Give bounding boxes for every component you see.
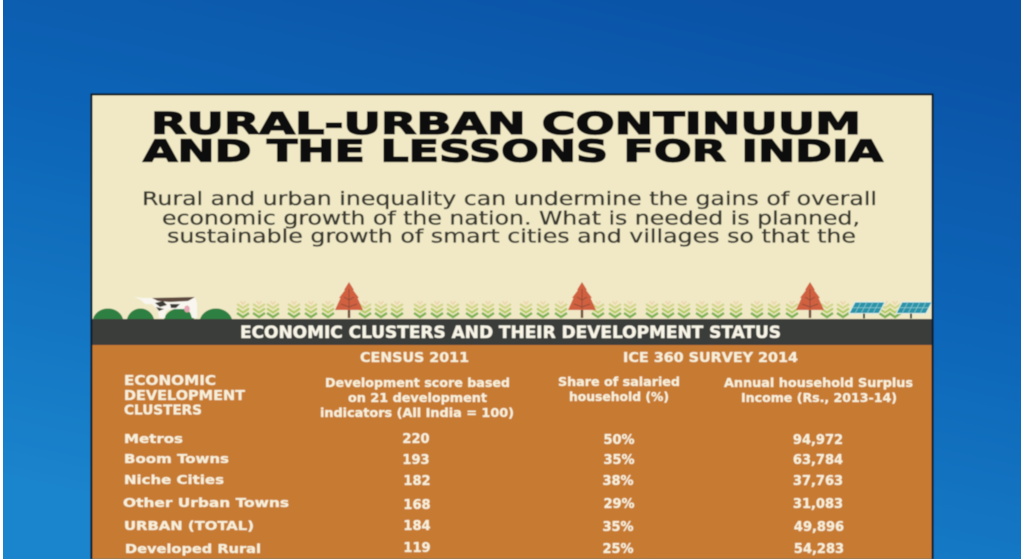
row: Metros: 220 [402,432,430,447]
row: Boom Towns [124,451,843,468]
row: Boom Towns: 63,784 [793,453,843,468]
row: Metros [124,431,843,448]
column header: salaried share: household (%) [569,390,669,404]
column header: salaried share [558,375,680,404]
row: Niche Cities: Niche Cities [124,472,224,487]
row header label: CLUSTERS [124,402,202,418]
row: Other Urban Towns: Other Urban Towns [123,495,289,510]
row: Urban total: 49,896 [794,520,844,535]
column header: development score: Development score based [325,376,510,390]
row: Niche Cities: 38% [602,474,634,489]
column group headings [360,350,798,366]
row: Other Urban Towns: 168 [403,498,431,513]
title: AND THE LESSONS FOR INDIA [143,134,884,170]
row: Other Urban Towns: 31,083 [793,497,843,512]
row: Boom Towns: 35% [603,453,635,468]
row header label: ECONOMIC [124,373,216,389]
crop row illustration [237,301,901,317]
column header: surplus income: Annual household Surplus [724,376,913,390]
row: Urban total: 35% [602,520,634,535]
row: Metros: Metros [124,431,183,446]
row: Developed Rural [125,541,844,557]
column header: development score [320,376,514,420]
row: Other Urban Towns [123,495,843,513]
column group headings: CENSUS 2011 [360,350,469,366]
row: Niche Cities: 37,763 [793,474,843,489]
section banner [92,319,932,345]
column group headings: ICE 360 SURVEY 2014 [623,350,798,366]
column header: development score: indicators (All India = 100) [320,406,514,420]
intro text [142,188,877,248]
row: Metros: 94,972 [793,433,843,448]
row: Developed Rural: 119 [403,541,431,556]
intro text: Rural and urban inequality can undermine the gains of overall [142,188,877,210]
intro text: sustainable growth of smart cities and villages so that the [167,226,856,248]
row: Boom Towns: Boom Towns [124,451,229,466]
title [143,107,884,170]
column header: development score: on 21 development [348,391,487,405]
row: Urban total: URBAN (TOTAL) [124,518,254,533]
row: Other Urban Towns: 29% [603,497,635,512]
row header label [124,373,246,418]
title: RURAL-URBAN CONTINUUM [151,107,861,142]
row: Developed Rural: 25% [602,542,634,557]
row: Niche Cities: 182 [403,474,431,489]
row: Developed Rural: 54,283 [794,542,844,557]
icon: bushes [93,308,232,319]
icon: cow [134,297,197,318]
row: Urban total [124,518,844,535]
column header: surplus income: Income (Rs., 2013-14) [741,391,897,405]
intro text: economic growth of the nation. What is needed is planned, [162,208,860,230]
row: Urban total: 184 [403,519,431,534]
row header label: DEVELOPMENT [124,388,246,404]
row: Boom Towns: 193 [402,453,430,468]
infographic panel [92,94,932,559]
panel: cream header [92,94,932,320]
row: Developed Rural: Developed Rural [125,541,261,556]
column header: surplus income [724,376,913,405]
panel: orange table [92,345,932,559]
icon: trees [335,282,824,318]
panel side borders [92,94,932,559]
section banner: ECONOMIC CLUSTERS AND THEIR DEVELOPMENT STATUS [240,323,781,342]
icon: solar panels [849,302,932,318]
row: Metros: 50% [603,433,635,448]
row: Niche Cities [124,472,843,489]
column header: salaried share: Share of salaried [558,375,680,389]
